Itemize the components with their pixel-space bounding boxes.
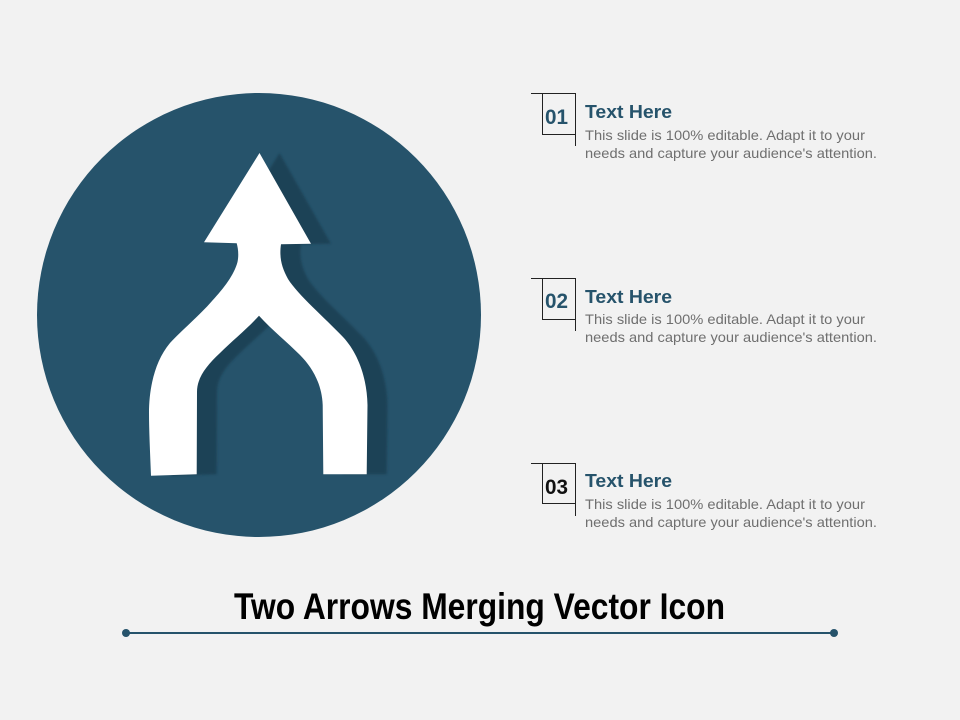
icon: circle with merging arrows xyxy=(37,93,481,537)
title underline with end dots xyxy=(122,629,838,637)
body text 01: This slide is 100% editable. Adapt it to your xyxy=(585,127,865,143)
arrow xyxy=(149,153,368,476)
item 02 xyxy=(531,278,877,345)
arrow shadow xyxy=(169,153,388,476)
body text 03: This slide is 100% editable. Adapt it to your xyxy=(585,496,865,512)
number box 01 xyxy=(531,94,576,146)
number 03: 03 xyxy=(545,476,568,499)
item 01 xyxy=(531,94,877,161)
number box 03 xyxy=(531,464,576,516)
body text 02 xyxy=(585,311,877,345)
body text 02: This slide is 100% editable. Adapt it to your xyxy=(585,311,865,327)
body text 02: needs and capture your audience's attention. xyxy=(585,329,877,345)
heading 03: Text Here xyxy=(585,471,672,491)
body text 01: needs and capture your audience's attention. xyxy=(585,145,877,161)
heading 01: Text Here xyxy=(585,102,672,122)
body text 03: needs and capture your audience's attention. xyxy=(585,514,877,530)
title: Two Arrows Merging Vector Icon xyxy=(234,586,725,627)
heading 02: Text Here xyxy=(585,287,672,307)
item 03 xyxy=(531,464,877,530)
number 02: 02 xyxy=(545,290,568,313)
number 01: 01 xyxy=(545,106,568,129)
body text 01 xyxy=(585,127,877,161)
body text 03 xyxy=(585,496,877,530)
number box 02 xyxy=(531,278,576,331)
